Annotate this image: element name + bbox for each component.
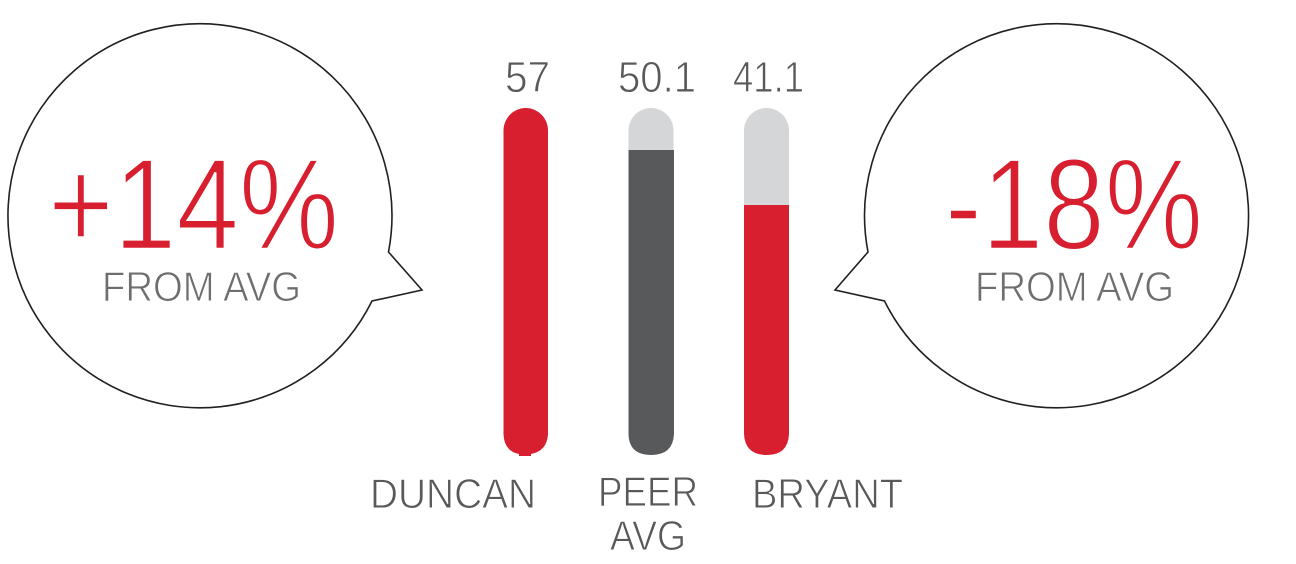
callout: right speech bubble -18% — [835, 24, 1249, 408]
bar: Bryant 41.1 — [733, 53, 903, 517]
bar: Duncan 57 — [370, 53, 550, 517]
caption: from avg right: FROM AVG — [975, 263, 1174, 310]
bar: Peer Avg 50.1: AVG — [610, 512, 686, 559]
label: Duncan: DUNCAN — [370, 470, 536, 517]
stat: +14%: +14% — [48, 131, 339, 277]
label: Peer Avg: PEER — [598, 468, 698, 515]
caption: from avg left: FROM AVG — [102, 263, 301, 310]
callout: left speech bubble +14% — [8, 24, 422, 408]
value: 50.1: 50.1 — [618, 53, 696, 102]
speech bubble outline left — [8, 24, 422, 408]
bar chart — [370, 53, 903, 559]
bar: Peer Avg 50.1 — [598, 53, 698, 559]
value: 41.1: 41.1 — [733, 53, 804, 102]
stat: -18%: -18% — [945, 131, 1203, 277]
label: Bryant: BRYANT — [752, 470, 903, 517]
speech bubble outline right — [835, 24, 1249, 408]
value: 57: 57 — [505, 53, 550, 102]
